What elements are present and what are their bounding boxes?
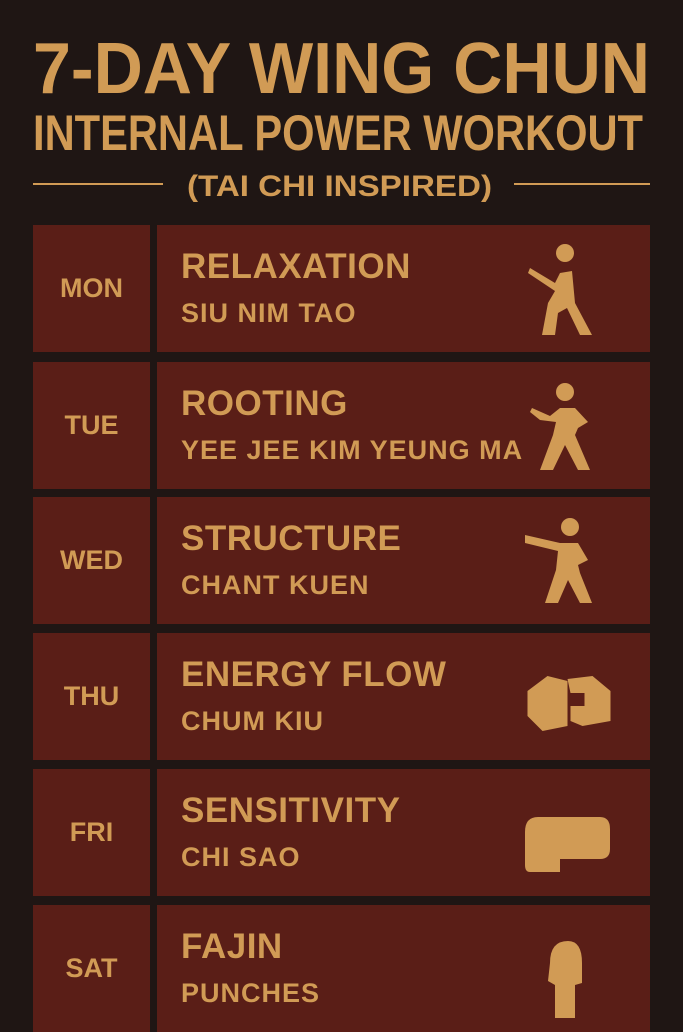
row: thursday: CHUM KIU	[181, 706, 324, 736]
row: friday: SENSITIVITY	[181, 791, 400, 830]
row: tuesday: TUE	[64, 410, 118, 440]
icon: fists	[528, 676, 610, 731]
icon: fist upright	[548, 941, 582, 1018]
row: wednesday: WED	[60, 545, 123, 575]
row: wednesday: CHANT KUEN	[181, 570, 370, 600]
row: tuesday	[33, 362, 650, 489]
row: friday	[33, 769, 650, 896]
row: tuesday: ROOTING	[181, 384, 348, 423]
row: friday: FRI	[70, 817, 113, 847]
row: saturday: FAJIN	[181, 927, 283, 966]
row: monday: MON	[60, 273, 123, 303]
title: (TAI CHI INSPIRED)	[187, 170, 492, 203]
row: wednesday: STRUCTURE	[181, 519, 401, 558]
title	[33, 29, 650, 203]
row: thursday	[33, 633, 650, 760]
icon: figure	[530, 383, 590, 470]
icon: fist	[525, 817, 610, 872]
row: tuesday: YEE JEE KIM YEUNG MA	[181, 435, 523, 465]
row: friday: CHI SAO	[181, 842, 301, 872]
row: monday	[33, 225, 650, 352]
row: monday: SIU NIM TAO	[181, 298, 356, 328]
title: 7-DAY WING CHUN	[33, 29, 650, 109]
icon: figure	[528, 244, 592, 335]
row: wednesday	[33, 497, 650, 624]
row: saturday	[33, 905, 650, 1032]
row: saturday: PUNCHES	[181, 978, 320, 1008]
row: thursday: ENERGY FLOW	[181, 655, 446, 694]
row: thursday: THU	[64, 681, 119, 711]
row: monday: RELAXATION	[181, 247, 411, 286]
icon: figure	[525, 518, 592, 603]
row: saturday: SAT	[66, 953, 118, 983]
